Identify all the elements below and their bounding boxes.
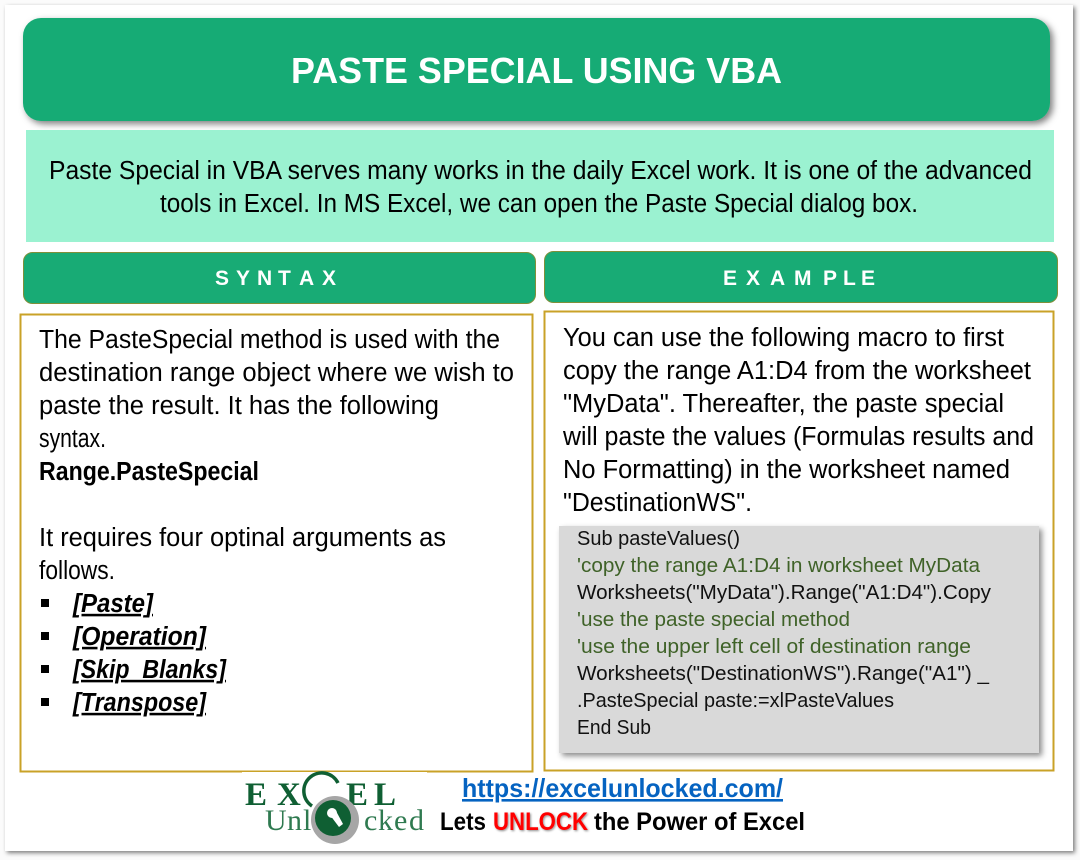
syntax description [39, 326, 514, 453]
heading: syntax [24, 252, 536, 304]
arguments intro: follows. [39, 557, 115, 585]
code block: .PasteSpecial paste:=xlPasteValues [577, 689, 894, 712]
logo: Unlo cked [265, 804, 424, 837]
tagline [440, 808, 805, 836]
arguments list: [Transpose] [72, 689, 207, 717]
title: PASTE SPECIAL USING VBA [291, 50, 782, 91]
tagline: the Power of Excel [594, 808, 805, 836]
code block: End Sub [577, 716, 651, 739]
logo: EX C EL [245, 777, 396, 813]
intro panel [26, 130, 1054, 242]
heading: example: EXAMPLE [723, 267, 875, 290]
intro text: tools in Excel. In MS Excel, we can open the Paste Special dialog box. [160, 190, 918, 218]
intro text: Paste Special in VBA serves many works in the daily Excel work. It is one of the advanced [49, 157, 1032, 185]
panel: syntax [20, 314, 532, 772]
arguments list: [Operation] [72, 623, 207, 651]
heading: syntax: SYNTAX [215, 267, 336, 290]
syntax description: The PasteSpecial method is used with the [39, 326, 500, 354]
syntax code name: Range.PasteSpecial [39, 458, 259, 486]
arguments list: [Skip_Blanks] [72, 656, 227, 684]
icon: lock [311, 796, 359, 844]
tagline: Lets [440, 808, 486, 836]
code block: 'copy the range A1:D4 in worksheet MyData [577, 554, 981, 577]
example description [562, 324, 1034, 517]
intro text [49, 157, 1032, 218]
code block: 'use the upper left cell of destination range [577, 635, 971, 658]
syntax description: paste the result. It has the following [39, 392, 439, 420]
example description: copy the range A1:D4 from the worksheet [563, 357, 1031, 385]
website link: https://excelunlocked.com/ [462, 773, 783, 803]
tagline: UNLOCK [493, 808, 588, 836]
syntax description: destination range object where we wish to [39, 359, 514, 387]
example description: will paste the values (Formulas results and [562, 423, 1034, 451]
heading: example [544, 252, 1058, 302]
arguments intro: It requires four optinal arguments as [39, 524, 446, 552]
panel: example [544, 312, 1054, 770]
syntax description: syntax. [39, 425, 106, 453]
code block: Sub pasteValues() [577, 527, 740, 550]
code block: Worksheets("DestinationWS").Range("A1") _ [577, 662, 990, 685]
arguments list [41, 590, 227, 717]
arguments list: [Paste] [72, 590, 154, 618]
logo [242, 772, 427, 848]
arguments intro [39, 524, 446, 585]
code block [559, 526, 1039, 753]
code block: Worksheets("MyData").Range("A1:D4").Copy [577, 581, 992, 604]
example description: You can use the following macro to first [563, 324, 1004, 352]
title banner [23, 18, 1050, 121]
example description: "MyData". Thereafter, the paste special [563, 390, 1004, 418]
code block: 'use the paste special method [577, 608, 850, 631]
example description: No Formatting) in the worksheet named [563, 456, 1010, 484]
example description: "DestinationWS". [563, 489, 752, 517]
